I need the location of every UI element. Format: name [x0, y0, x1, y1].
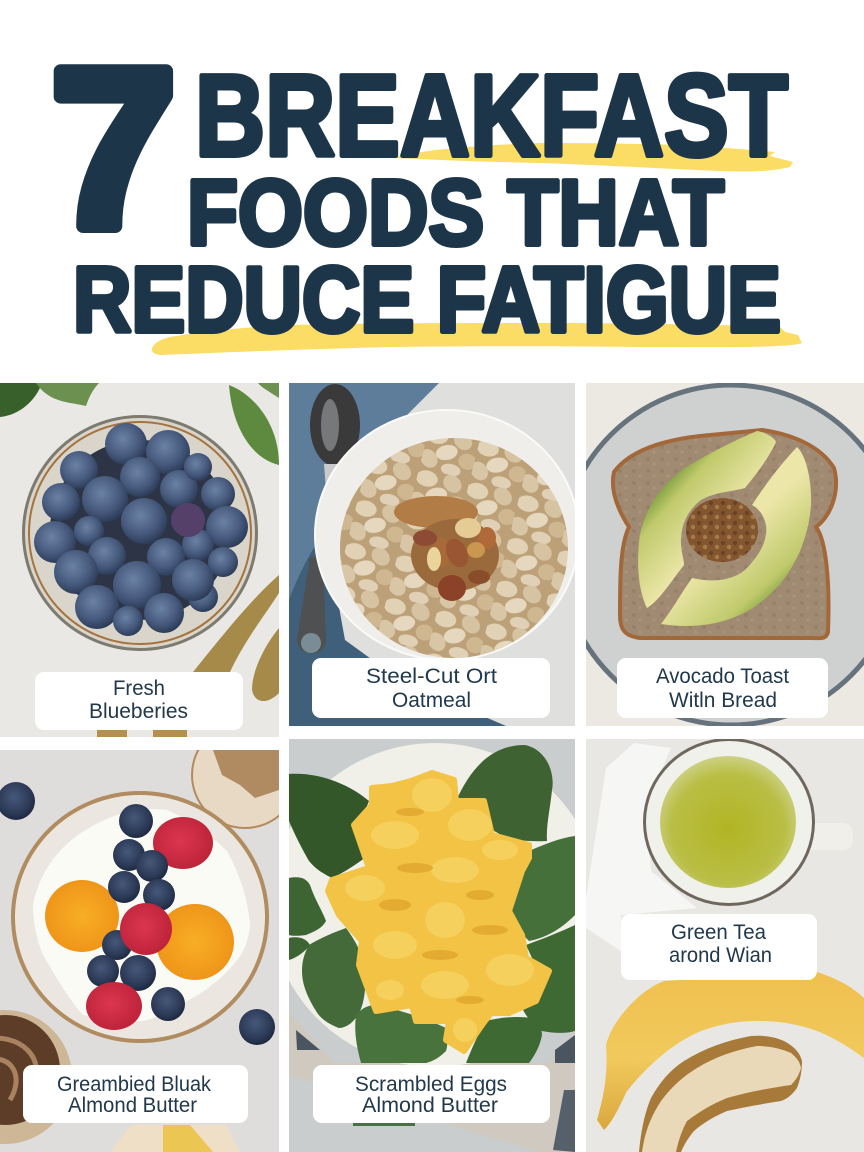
label: Almond Butter — [68, 1094, 197, 1117]
label — [23, 1065, 248, 1123]
label — [312, 658, 550, 718]
icon: spinach leaves — [289, 745, 575, 1126]
big number 7: 7 — [51, 22, 176, 274]
icon: bowl — [11, 791, 269, 1043]
icon: bowl of oats — [315, 410, 579, 660]
label: Steel-Cut Ort — [366, 665, 497, 688]
panel: green tea and banana — [586, 738, 864, 1152]
panel: blueberries — [0, 383, 279, 737]
icon: toast — [613, 430, 836, 638]
label: Blueberies — [89, 700, 188, 723]
icon: banana — [597, 972, 864, 1130]
icon: plate — [561, 385, 864, 725]
icon: tea cup — [643, 739, 815, 906]
label: Scrambled Eggs — [355, 1073, 507, 1096]
highlight strokes — [152, 143, 802, 355]
label — [617, 658, 828, 718]
icon: almond butter dish — [0, 1010, 72, 1144]
label: Almond Butter — [362, 1094, 498, 1117]
heading line 2: FOODS THAT — [187, 160, 724, 264]
egg yolks — [45, 880, 119, 952]
icon: striped cloth — [289, 1012, 575, 1152]
label — [35, 672, 243, 730]
icon: avocado halves — [638, 431, 811, 626]
title — [51, 22, 802, 355]
label: Witln Bread — [669, 689, 777, 712]
icon: avocado crumbs — [686, 498, 758, 562]
icon: loose blueberries — [0, 782, 275, 1045]
egg whites — [33, 809, 250, 1021]
icon: spoon — [297, 384, 360, 654]
label: arond Wian — [669, 944, 772, 967]
icon: gold spoons — [97, 575, 279, 737]
icon: scrambled eggs — [328, 773, 549, 1051]
label — [313, 1065, 550, 1123]
icon: wooden board — [191, 750, 279, 829]
icon: leaves — [0, 383, 279, 465]
label: Greambied Bluak — [57, 1073, 211, 1096]
panel: oatmeal — [289, 383, 579, 726]
icon: banana peel — [639, 1036, 802, 1152]
label: Green Tea — [671, 921, 766, 944]
icon: plate — [289, 743, 575, 1065]
panel: eggs and berries bowl — [0, 750, 279, 1152]
panel: avocado toast — [561, 383, 864, 726]
panel: scrambled eggs — [289, 739, 575, 1152]
berries on bowl — [86, 804, 213, 1030]
label: Fresh — [113, 677, 165, 700]
icon: blue cloth — [289, 383, 506, 726]
nuts topping — [394, 496, 499, 601]
label: Oatmeal — [392, 689, 471, 712]
icon: napkin — [586, 743, 697, 951]
icon: dish with egg — [110, 1125, 240, 1152]
label: Avocado Toast — [656, 665, 789, 688]
icon: bowl of blueberries — [22, 415, 258, 651]
heading line 3: REDUCE FATIGUE — [73, 248, 781, 352]
label — [621, 914, 817, 980]
